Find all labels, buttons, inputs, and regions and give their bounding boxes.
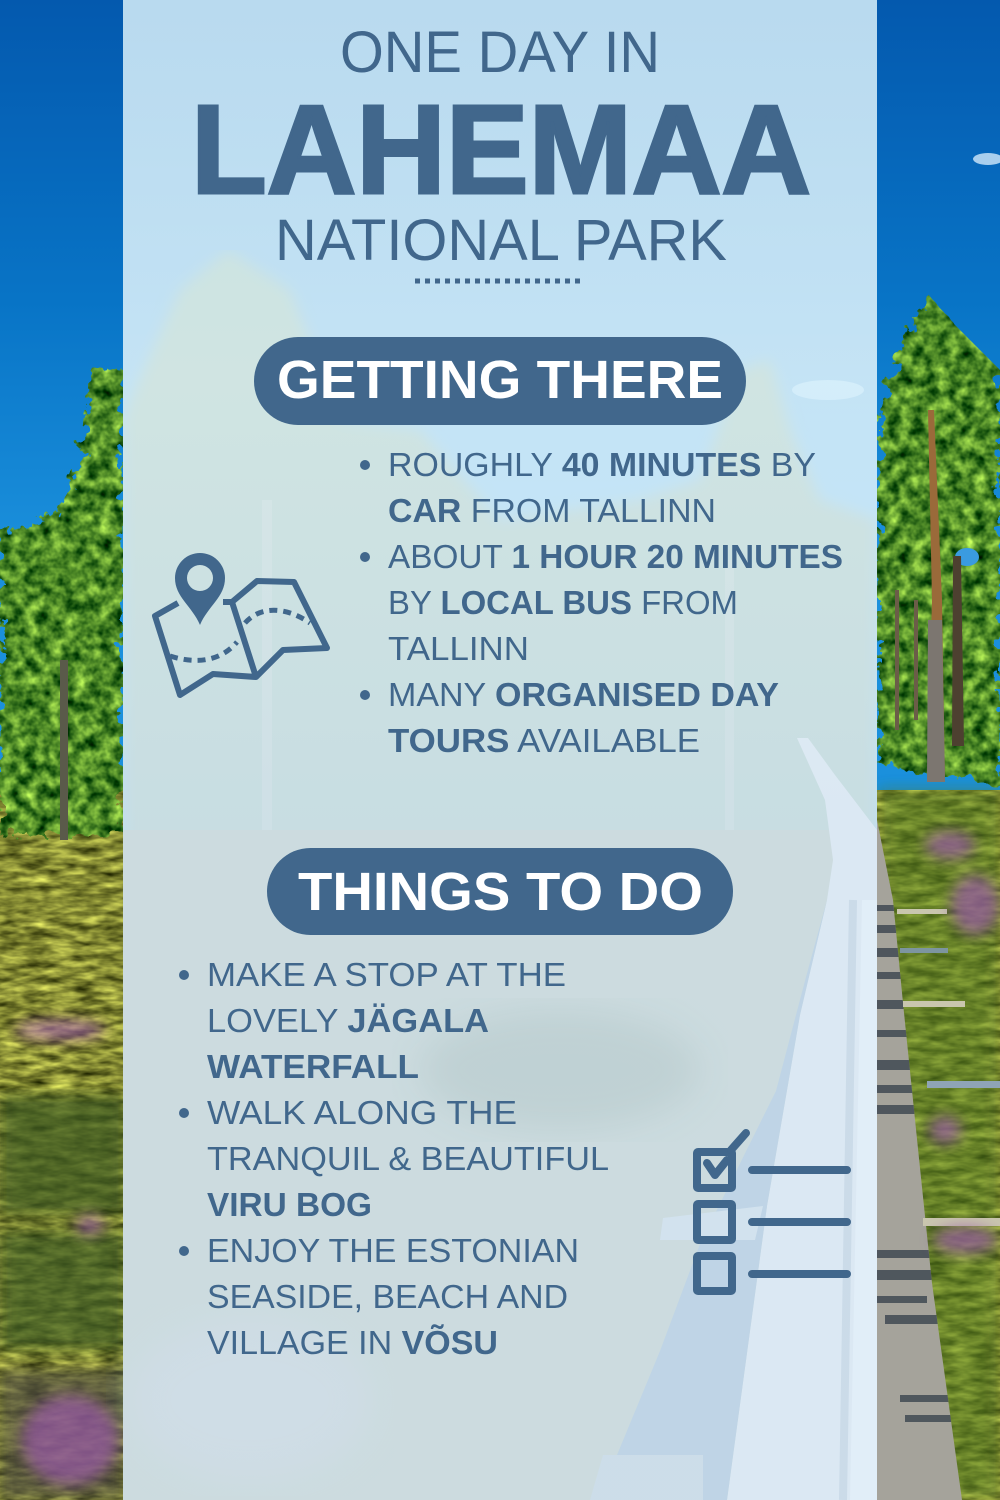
translucent centre panel	[123, 0, 877, 1500]
list: getting there: ABOUT 1 HOUR 20 MINUTES	[388, 538, 843, 575]
list: things to do: ENJOY THE ESTONIAN	[207, 1232, 579, 1269]
right wooden rail	[877, 820, 962, 1500]
list: things to do: WATERFALL	[207, 1048, 419, 1085]
heather flowers	[15, 831, 999, 1485]
list: getting there: TALLINN	[388, 630, 529, 667]
list: things to do: LOVELY JÄGALA	[207, 1002, 489, 1039]
list: things to do: TRANQUIL & BEAUTIFUL	[207, 1140, 609, 1177]
list: things to do: WALK ALONG THE	[207, 1094, 517, 1131]
list: things to do	[179, 956, 609, 1361]
plank and left rail of the boardwalk	[727, 738, 877, 1500]
heading pill: getting there: GETTING THERE	[277, 350, 723, 410]
icon: map with location pin	[155, 553, 327, 695]
list: things to do: SEASIDE, BEACH AND	[207, 1278, 568, 1315]
list: getting there: TOURS AVAILABLE	[388, 722, 700, 759]
list: things to do: VIRU BOG	[207, 1186, 372, 1223]
title line: Lahemaa: LAHEMAA	[191, 79, 811, 220]
list: getting there: MANY ORGANISED DAY	[388, 676, 779, 713]
heading pill: getting there	[254, 337, 746, 425]
title line: national park: NATIONAL PARK	[275, 208, 727, 273]
heading pill: things to do: THINGS TO DO	[298, 862, 703, 922]
list: things to do: VILLAGE IN VÕSU	[207, 1324, 498, 1361]
underlay of the panel: sky, faded trees and ground	[110, 254, 877, 1500]
title	[191, 20, 811, 273]
list: getting there: BY LOCAL BUS FROM	[388, 584, 738, 621]
list: getting there: CAR FROM TALLINN	[388, 492, 716, 529]
title line: one day in: ONE DAY IN	[340, 20, 660, 85]
icon: checklist	[697, 1133, 847, 1291]
heading pill: things to do	[267, 848, 733, 935]
list: things to do: MAKE A STOP AT THE	[207, 956, 566, 993]
list: getting there	[360, 446, 843, 759]
list: getting there: ROUGHLY 40 MINUTES BY	[388, 446, 816, 483]
